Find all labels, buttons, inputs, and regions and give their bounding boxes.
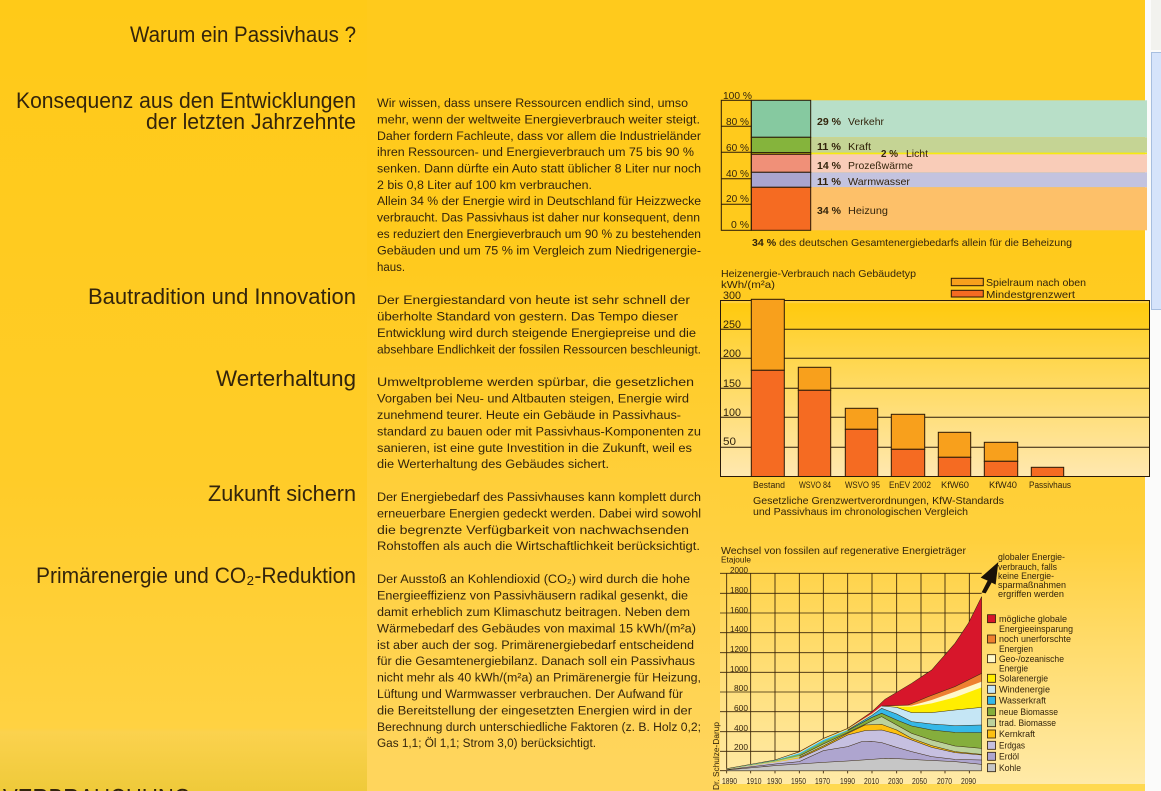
legend: Windenergie [999,684,1050,696]
legend: Energien [999,644,1033,655]
legend: Erdgas [999,740,1025,752]
text block: Bautradition: Entwicklung wird durch steigende Energiepreise und die [377,326,696,340]
x axis labels: KfW40 [989,480,1017,490]
legend: Geo-/ozeanische [999,654,1064,665]
legend: Wasserkraft [999,696,1046,706]
band labels: 2 % [881,148,899,160]
band labels: 11 % [817,176,842,188]
legend: Solarenergie [999,674,1048,684]
x axis labels: 1970 [815,777,830,786]
legend [988,614,1073,774]
band labels: Heizung [848,205,888,217]
text block: Primärenergie: Wärmebedarf des Gebäudes von maximal 15 kWh/(m²a) [377,622,696,636]
legend: Energieeinsparung [999,624,1073,635]
y axis labels: 600 [734,703,748,713]
x axis labels: Passivhaus [1029,480,1071,490]
chart caption: 34 % des deutschen Gesamtenergiebedarfs allein für die Beheizung [752,237,1072,249]
text block: Primärenergie: ist aber auch der sog. Primärenergiebedarf entscheidend [377,638,694,652]
axis labels: 100 % [723,91,752,102]
x axis labels: WSVO 95 [845,480,880,490]
y axis labels: 1000 [730,664,748,674]
text block: Konsequenz: Allein 34 % der Energie wird in Deutschland für Heizzwecke [377,194,701,208]
text block: Konsequenz: es reduziert den Energieverbrauch um 90 % zu bestehenden [377,227,701,241]
y axis labels: 300 [723,290,741,302]
band labels [817,116,928,217]
band labels: Verkehr [848,116,884,128]
text block: Primärenergie: die Bereitstellung der eingesetzten Energien wird in der [377,704,692,718]
legend: mögliche globale [999,614,1067,625]
arrow [981,562,998,593]
axis labels: 40 % [726,169,749,180]
heading: Konsequenz [16,88,356,134]
band labels: 29 % [817,116,842,128]
chart: share of energy demand [721,91,1147,249]
y axis labels: 150 [723,378,741,390]
x axis labels: 2010 [864,777,879,786]
bars [751,299,1064,476]
x axis labels: 1990 [840,777,855,786]
chart caption: und Passivhaus im chronologischen Vergleich [753,506,968,518]
text block: Primärenergie: nicht mehr als 40 kWh/(m²a) an Primärenergie für Heizung, [377,670,701,684]
axis labels: 0 % [731,220,749,231]
legend [951,277,1086,301]
text block: Bautradition [377,293,701,356]
x axis labels: 2050 [912,777,927,786]
heading: Primärenergie und CO2-Reduktion: Primärenergie und CO₂-Reduktion [36,563,356,588]
band labels: Licht [906,148,928,160]
y axis labels: 2000 [730,565,748,575]
band labels: 34 % [817,205,842,217]
text block: Primärenergie [377,572,701,750]
text block: Werterhaltung: die Werterhaltung des Gebäudes sichert. [377,457,609,471]
text block: Konsequenz: Daher fordern Fachleute, dass vor allem die Industrieländer [377,129,701,143]
text block: Primärenergie: Energieeffizienz von Passivhäusern radikal gesenkt, die [377,588,688,602]
legend: trad. Biomasse [999,718,1056,729]
y axis labels: 1400 [730,624,748,634]
legend: Erdöl [999,752,1019,762]
text block: Primärenergie: Gas 1,1; Öl 1,1; Strom 3,0) berücksichtigt. [377,736,596,750]
text block: Zukunft sichern [377,490,701,553]
text block: Bautradition: Der Energiestandard von heute ist sehr schnell der [377,293,690,307]
stacked areas [727,597,982,771]
chart: heating energy by building type [720,268,1150,518]
text block: Konsequenz: senken. Dann dürfte ein Auto statt üblicher 8 Liter nur noch [377,162,701,176]
axis box [721,100,751,230]
axis labels: 20 % [726,194,749,205]
x axis labels: KfW60 [941,480,969,490]
text block: Primärenergie: für die Gesamtenergiebilanz. Danach soll ein Passivhaus [377,654,695,668]
annotation: ergriffen werden [998,589,1064,600]
legend: noch unerforschte [999,634,1071,645]
x axis labels: 1890 [722,777,737,786]
chart: fossil to renewable energy transition [712,545,1073,790]
band labels: Prozeßwärme [848,160,913,172]
axis labels: 80 % [726,117,749,128]
text block: Konsequenz: haus. [377,260,405,274]
stacked bar [751,100,811,230]
chart caption [753,495,1004,518]
text block: Werterhaltung: Vorgaben bei Neu- und Altbauten steigen, Energie wird [377,392,689,406]
left column headings [3,22,356,791]
band labels: 11 % [817,141,842,153]
y axis labels: 1200 [730,644,748,654]
x axis labels: Bestand [753,480,785,490]
text block: Konsequenz: verbraucht. Das Passivhaus ist daher nur konsequent, denn [377,210,700,224]
text block: Werterhaltung: standard zu bauen oder mit Passivhaus-Komponenten zu [377,424,701,438]
chart title: kWh/(m²a) [721,279,775,291]
area outlines [727,597,982,771]
heading: Konsequenz: der letzten Jahrzehnte [146,109,356,134]
x axis labels: 1930 [767,777,782,786]
text block: Zukunft sichern: die begrenzte Verfügbarkeit von nachwachsenden [377,523,689,537]
text block: Werterhaltung: Umweltprobleme werden spürbar, die gesetzlichen [377,375,694,389]
text block: Zukunft sichern: Rohstoffen als auch die Wirtschaftlichkeit berücksichtigt. [377,539,700,553]
annotation: globaler Energie- [998,552,1065,563]
text block: Konsequenz: ihren Ressourcen- und Energieverbrauch um 75 bis 90 % [377,145,694,159]
grid lines [720,573,982,773]
chart title: Heizenergie-Verbrauch nach Gebäudetyp [721,268,916,280]
annotation: verbrauch, falls [998,562,1057,573]
x axis labels [722,777,976,786]
text block: Konsequenz [377,96,701,274]
x axis labels: WSVO 84 [799,480,831,490]
y axis labels: 250 [723,319,741,331]
text block: Werterhaltung: zunehmend teurer. Heute ein Gebäude in Passivhaus- [377,408,681,422]
x axis labels: EnEV 2002 [889,480,931,490]
plot area [720,300,1150,476]
text block: Bautradition: absehbare Endlichkeit der fossilen Ressourcen beschleunigt. [377,342,701,356]
x axis labels [753,480,1071,490]
x axis labels: 2070 [937,777,952,786]
text block: Zukunft sichern: erneuerbare Energien gedeckt werden. Dabei wird sowohl [377,506,701,520]
band labels: Kraft [848,141,871,153]
text block: Zukunft sichern: Der Energiebedarf des Passivhauses kann komplett durch [377,490,701,504]
text block: Werterhaltung [377,375,701,471]
band labels: Warmwasser [848,176,910,188]
chart title [721,268,916,291]
annotation [998,552,1066,600]
heading: Zukunft sichern: Zukunft sichern [208,481,356,506]
heading: Bautradition und Innovation: Bautradition und Innovation [88,284,356,309]
band labels: 14 % [817,160,842,172]
text block: Bautradition: überholte Standard von gestern. Das Tempo dieser [377,310,678,324]
legend: neue Biomasse [999,707,1058,718]
annotation: keine Energie- [998,571,1054,582]
y axis labels: 100 [723,407,741,419]
y axis labels [723,290,741,448]
x axis labels: 1950 [791,777,806,786]
text block: Werterhaltung: sanieren, ist eine gute Investition in die Zukunft, weil es [377,441,692,455]
x axis labels: 1910 [746,777,762,786]
y axis labels: 1600 [730,605,748,615]
heading: Warum ein Passivhaus: Warum ein Passivhaus ? [130,22,356,47]
y axis labels [730,565,748,752]
text block: Primärenergie: Berechnung durch unterschiedliche Faktoren (z. B. Holz 0,2; [377,720,701,734]
chart caption: Gesetzliche Grenzwertverordnungen, KfW-Standards [753,495,1004,507]
text block: Konsequenz: Gebäuden und um 75 % im Vergleich zum Niedrigenergie- [377,244,701,258]
axis labels: 60 % [726,143,749,154]
colour bands [811,100,1147,230]
legend: Mindestgrenzwert [986,289,1075,301]
heading: Werterhaltung: Werterhaltung [216,366,356,391]
text block: Primärenergie: Lüftung und Warmwasser verbrauchen. Der Aufwand für [377,687,683,701]
legend: Kernkraft [999,729,1035,740]
annotation: sparmaßnahmen [998,580,1066,591]
text block: Konsequenz: Wir wissen, dass unsere Ressourcen endlich sind, umso [377,96,688,110]
chart title: Wechsel von fossilen auf regenerative Energieträger [721,545,967,557]
text block: Primärenergie: Der Ausstoß an Kohlendioxid (CO₂) wird durch die hohe [377,572,690,586]
y axis labels: 400 [734,723,748,733]
legend: Spielraum nach oben [986,277,1086,289]
y axis labels: 200 [734,742,748,752]
legend: Kohle [999,763,1021,774]
text block: Konsequenz: mehr, wenn der weltweite Energieverbrauch weiter steigt. [377,112,700,126]
y axis labels: 200 [723,348,741,360]
axis labels [723,91,752,231]
x axis labels: 2090 [961,777,976,786]
text block: Primärenergie: damit erheblich zum Klimaschutz beitragen. Neben dem [377,605,690,619]
y axis labels: 1800 [730,585,748,595]
heading: Konsequenz: Konsequenz aus den Entwicklungen [16,88,356,113]
credit: Dr. Schulze-Darup [712,721,721,790]
text block: Konsequenz: 2 bis 0,8 Liter auf 100 km verbrauchen. [377,178,592,192]
unit label: Etajoule [721,556,752,564]
legend: Energie [999,664,1028,674]
x axis labels: 2030 [888,777,903,786]
y axis labels: 50 [723,436,736,448]
y axis labels: 800 [734,683,748,693]
